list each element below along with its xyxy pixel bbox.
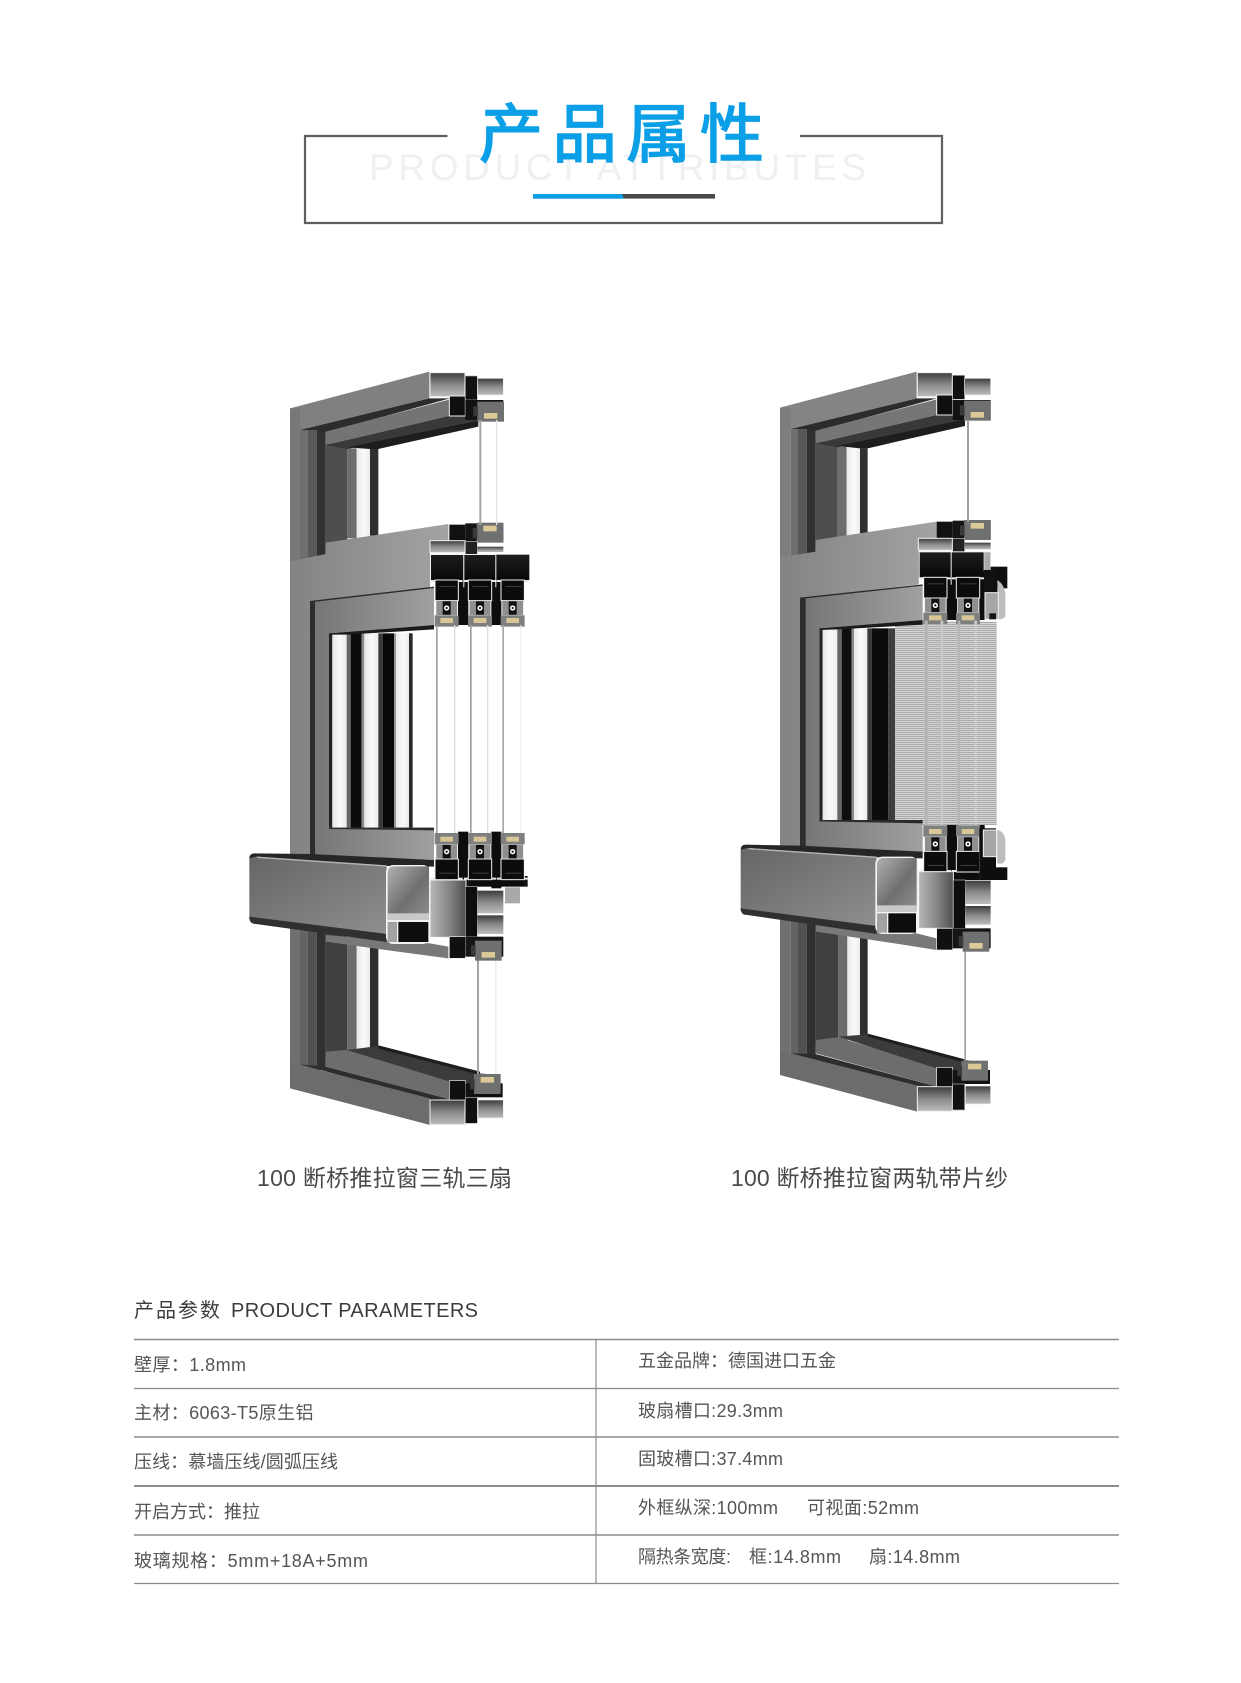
right column values: 玻扇槽口:29.3mm <box>638 1401 783 1421</box>
parameters table <box>134 1339 1119 1584</box>
horizontal cover bar <box>249 853 448 958</box>
bottom frame faces <box>780 1034 985 1112</box>
horizontal cover bar <box>741 845 937 950</box>
upper transom profile section <box>430 523 529 627</box>
bottom frame profile section <box>430 1074 503 1125</box>
right column values: 五金品牌：德国进口五金 <box>638 1351 836 1371</box>
top frame profile section <box>430 373 504 422</box>
sash opening interior with fly screen <box>819 622 997 825</box>
left column values: 压线：慕墙压线/圆弧压线 <box>134 1452 338 1472</box>
left column values: 开启方式：推拉 <box>134 1502 260 1522</box>
right column values: 隔热条宽度: <box>638 1547 731 1567</box>
upper opening recess <box>791 428 868 557</box>
caption: left window: 100 断桥推拉窗三轨三扇 <box>257 1165 512 1191</box>
glass panes and screen stiles <box>925 420 977 1062</box>
right column values: 可视面:52mm <box>807 1498 919 1518</box>
title frame <box>305 136 942 223</box>
top frame faces <box>290 372 478 562</box>
title block <box>305 99 942 223</box>
sash opening interior <box>329 633 413 833</box>
table rules <box>134 1339 1119 1584</box>
product parameters heading <box>134 1299 478 1322</box>
upper transom profile section <box>918 520 991 624</box>
left column values <box>134 1355 368 1571</box>
lower opening recess <box>780 910 868 1075</box>
lower transom profile section <box>430 832 529 961</box>
top frame profile section <box>917 373 991 421</box>
left column values: 主材：6063-T5原生铝 <box>134 1403 314 1423</box>
screen sash profile top <box>984 552 1007 619</box>
title underline <box>533 194 715 199</box>
caption: right window: 100 断桥推拉窗两轨带片纱 <box>731 1165 1008 1191</box>
right column values: 固玻槽口:37.4mm <box>638 1449 783 1469</box>
english watermark subtitle: PRODUCT ATTRIBUTES <box>369 147 866 188</box>
left column values: 壁厚：1.8mm <box>134 1355 246 1375</box>
product parameters heading: 产品参数 <box>134 1299 220 1322</box>
bottom frame faces <box>290 1045 497 1125</box>
window illustration: two-track with screen <box>741 372 1007 1112</box>
right column values: 外框纵深:100mm <box>638 1498 778 1518</box>
top frame faces <box>780 372 965 559</box>
chinese title: 产品属性 <box>479 99 764 171</box>
right column values: 扇:14.8mm <box>869 1547 960 1567</box>
lower opening recess <box>290 917 378 1088</box>
upper opening recess <box>300 428 378 560</box>
glass panes <box>436 420 521 1075</box>
product parameters heading: PRODUCT PARAMETERS <box>231 1300 478 1322</box>
window illustration: three-track three-sash <box>249 372 529 1125</box>
middle transom <box>780 522 937 853</box>
left column values: 玻璃规格：5mm+18A+5mm <box>134 1551 368 1571</box>
middle transom <box>290 524 448 860</box>
right column values: 框:14.8mm <box>749 1547 841 1567</box>
screen sash profile bottom <box>979 828 1007 880</box>
bottom frame profile section <box>917 1061 991 1111</box>
right column values <box>638 1351 960 1567</box>
lower transom profile section <box>919 825 991 952</box>
